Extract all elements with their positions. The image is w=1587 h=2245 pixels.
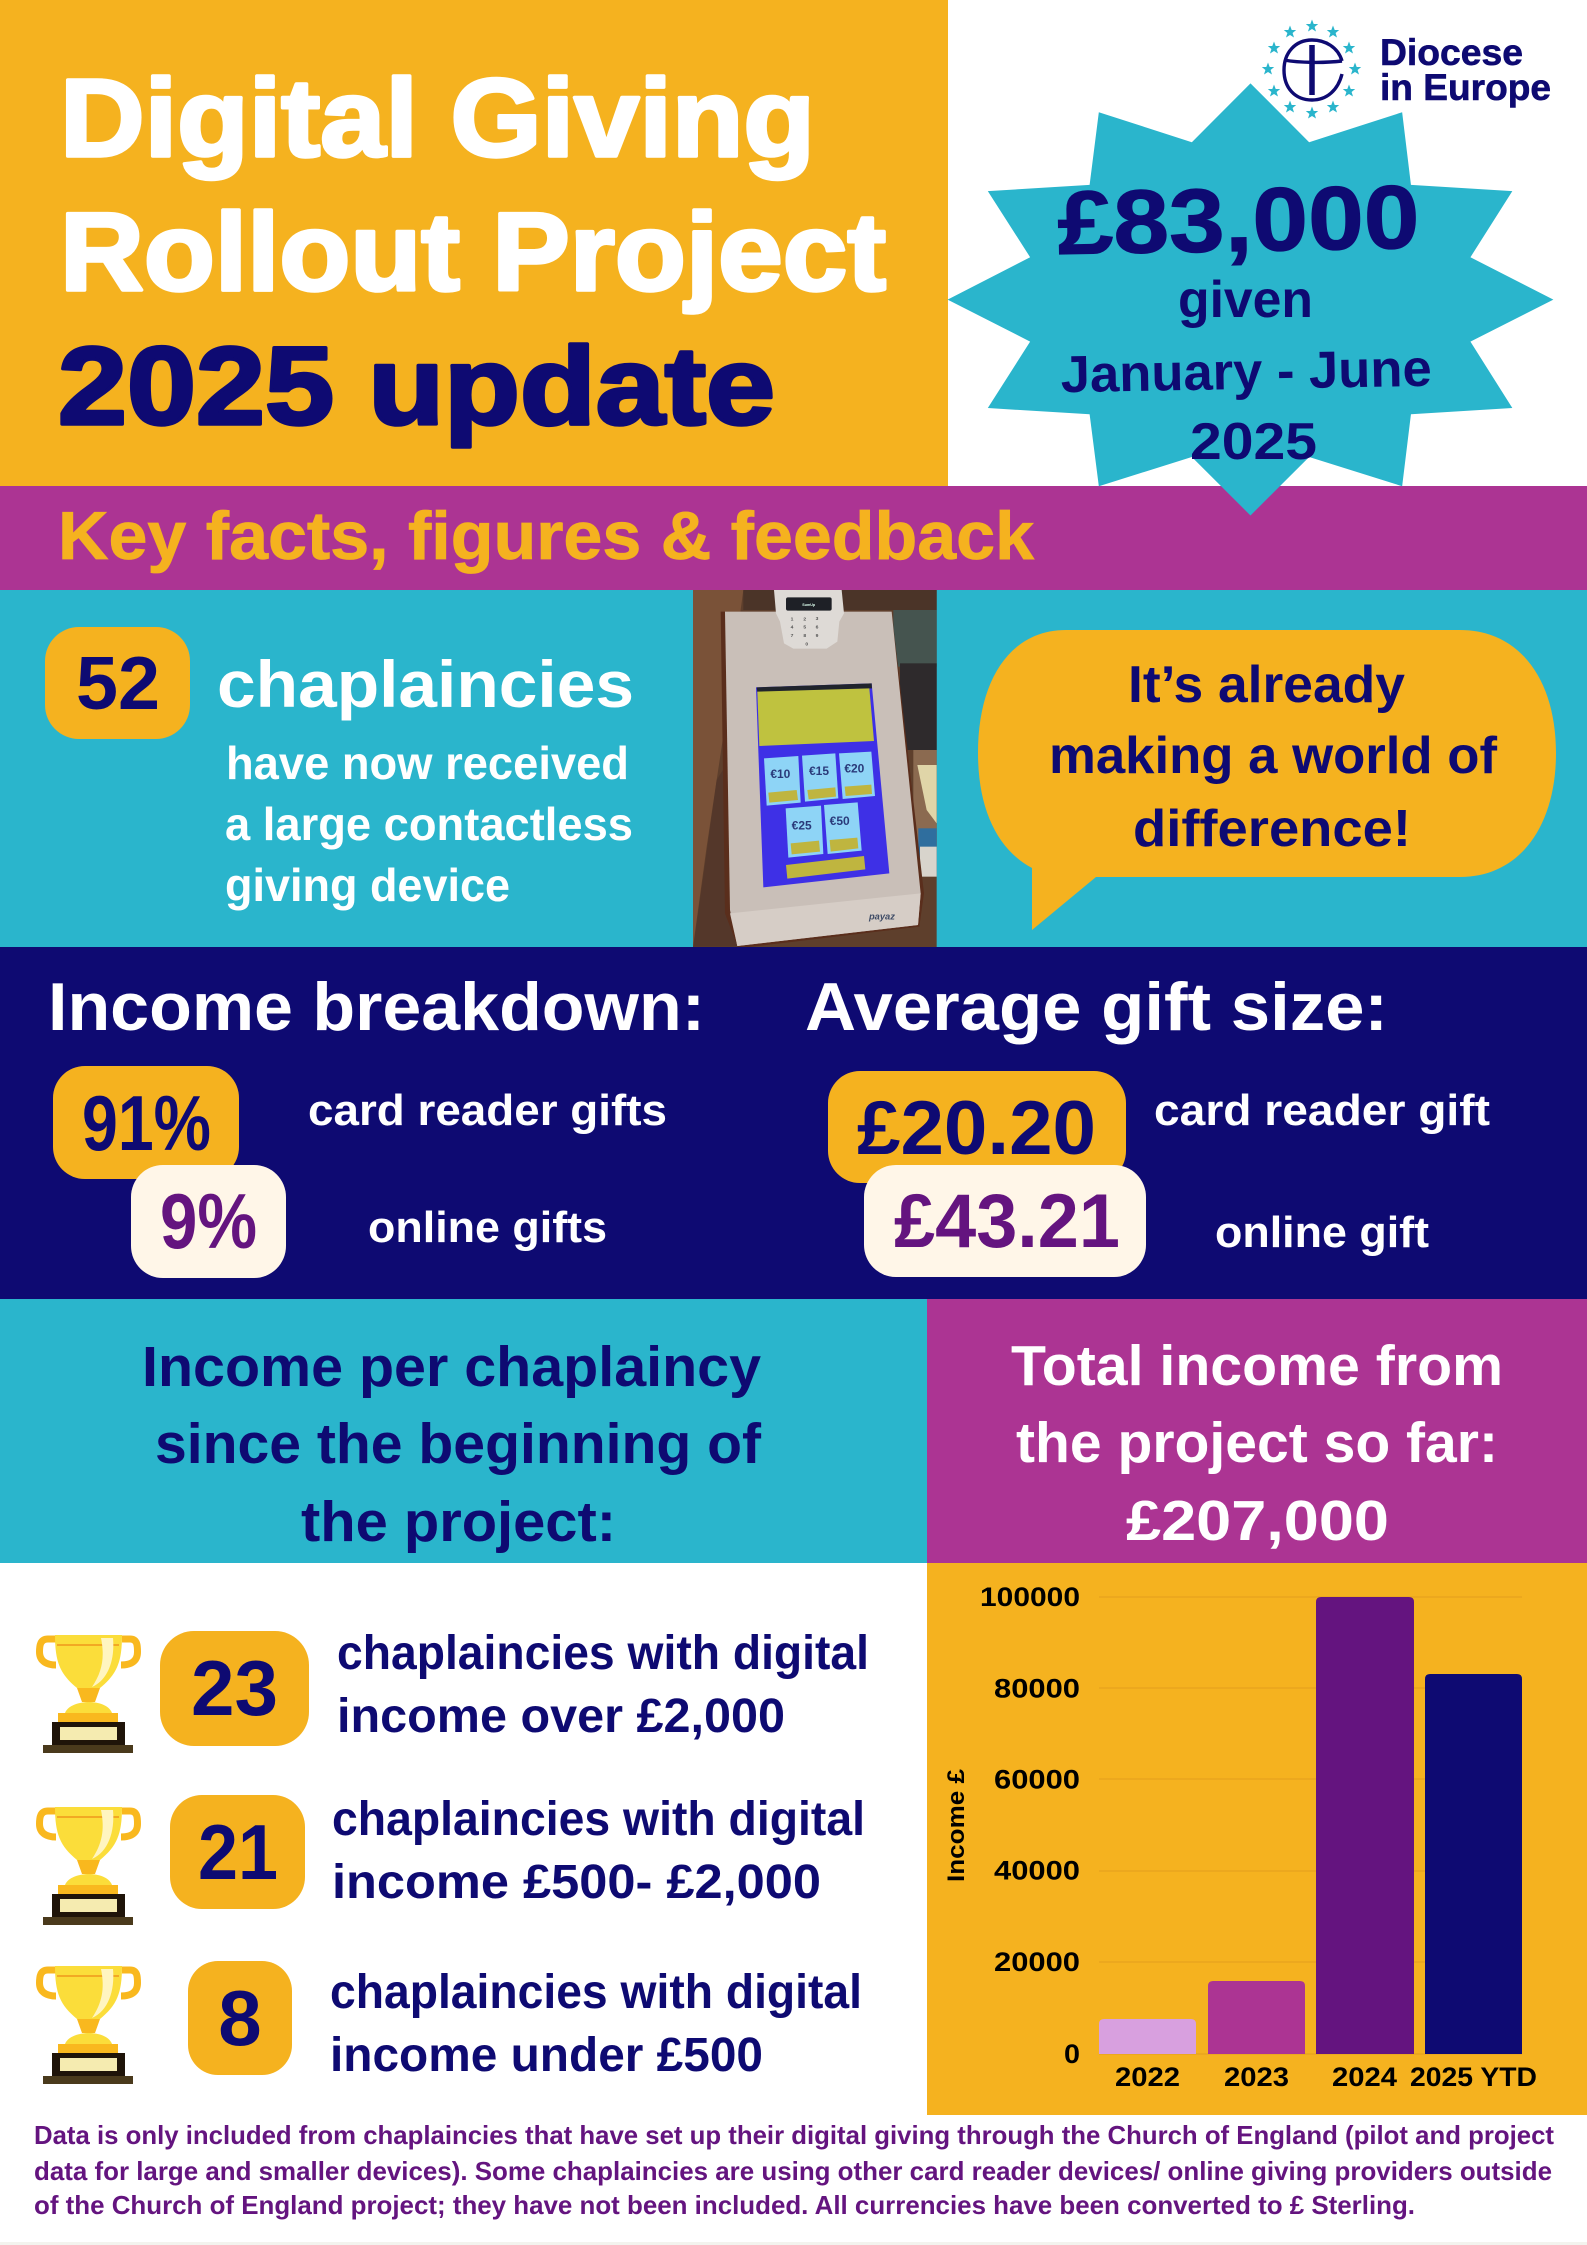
y axis labels: 100000: [980, 1582, 1080, 1612]
panel: total income: £207,000: [1126, 1489, 1389, 1553]
logo: Diocese in Europe: in Europe: [1380, 67, 1551, 108]
badge: 21: 21: [198, 1808, 278, 1896]
bar: 2025 YTD: [1425, 1674, 1522, 2054]
text: device description: a large contactless: [225, 798, 633, 850]
y axis labels: 80000: [994, 1674, 1080, 1704]
y axis labels: [980, 1582, 1080, 2069]
photo: contactless giving device: €50: [830, 814, 850, 828]
bar: 2024: [1316, 1597, 1414, 2054]
panel: income per chaplaincy heading: the project:: [301, 1490, 616, 1554]
badge: £43.21: £43.21: [894, 1179, 1120, 1264]
text: £500-£2,000: income £500- £2,000: [332, 1856, 821, 1909]
starburst callout: £83,000: given: [1178, 271, 1313, 329]
panel: income per chaplaincy heading: Income per chaplaincy: [142, 1335, 761, 1399]
text: under £500: [330, 1966, 862, 2082]
speech bubble: [978, 630, 1556, 930]
title: [58, 57, 886, 448]
speech bubble: making a world of: [1049, 727, 1498, 785]
photo: contactless giving device: €25: [792, 818, 812, 832]
photo: contactless giving device: 1: [791, 617, 794, 623]
title: Rollout Project: [60, 191, 886, 314]
starburst callout: £83,000: January - June: [1060, 340, 1432, 404]
label: online gifts: online gifts: [368, 1203, 607, 1252]
badge: 23: [160, 1631, 309, 1746]
text: under £500: chaplaincies with digital: [330, 1966, 862, 2019]
photo: contactless giving device: 4: [791, 625, 794, 631]
x axis labels: 2022: [1115, 2062, 1180, 2092]
photo: contactless giving device: payaz: [868, 911, 895, 921]
badge: 91%: [53, 1066, 239, 1179]
photo: contactless giving device: SumUp: [802, 603, 816, 607]
footnote: [34, 2120, 1554, 2220]
y axis labels: 20000: [994, 1947, 1080, 1977]
speech bubble: difference!: [1133, 800, 1411, 858]
photo: contactless giving device: €20: [844, 762, 865, 776]
text: device description: [225, 737, 633, 911]
badge: £20.20: £20.20: [857, 1086, 1096, 1171]
panel: total income: Total income from: [1011, 1334, 1503, 1398]
photo: contactless giving device: 8: [803, 633, 806, 639]
badge: 8: 8: [218, 1974, 262, 2062]
x axis labels: [1115, 2062, 1537, 2092]
bar chart: income per year: [927, 1563, 1587, 2115]
starburst callout: £83,000: [948, 83, 1553, 515]
bar: 2023: [1208, 1981, 1305, 2054]
badge: 9%: 9%: [160, 1177, 257, 1265]
panel: total income: the project so far:: [1016, 1411, 1498, 1475]
panel: title header: [0, 0, 948, 486]
photo: contactless giving device: €15: [809, 764, 829, 778]
heading: income breakdown: Income breakdown:: [48, 969, 705, 1045]
footnote: data for large and smaller devices). Some chaplaincies are using other card reader devices/ online giving providers outside: [34, 2156, 1552, 2186]
y axis labels: 40000: [994, 1856, 1080, 1886]
badge: £43.21: [864, 1165, 1146, 1277]
y axis labels: 60000: [994, 1764, 1080, 1794]
card reader: [774, 590, 844, 649]
text: over £2,000: income over £2,000: [337, 1690, 785, 1743]
panel: total income: [927, 1299, 1587, 1563]
photo: contactless giving device: 5: [803, 625, 806, 631]
panel: income breakdown and average gift: [0, 947, 1587, 1299]
badge: 52: 52: [76, 641, 160, 725]
logo: Diocese in Europe: Diocese: [1380, 32, 1523, 73]
label: online gift: online gift: [1215, 1208, 1429, 1257]
panel: key facts band: [0, 486, 1587, 590]
photo: contactless giving device: 3: [816, 616, 819, 622]
photo: contactless giving device: 0: [805, 641, 808, 647]
icon: trophy 1: [40, 1635, 138, 1753]
x axis labels: 2025 YTD: [1410, 2062, 1537, 2092]
text: under £500: income under £500: [330, 2029, 763, 2082]
text: £500-£2,000: [332, 1793, 865, 1909]
speech bubble: It’s already: [1128, 656, 1405, 714]
logo: Diocese in Europe: [1262, 20, 1551, 118]
bar: 2022: [1099, 2019, 1196, 2054]
photo: contactless giving device: 7: [791, 633, 794, 639]
starburst callout: £83,000: 2025: [1190, 413, 1317, 471]
text: chaplaincies: chaplaincies: [217, 647, 634, 721]
heading: average gift size: Average gift size:: [805, 969, 1388, 1045]
footnote: of the Church of England project; they have not been included. All currencies have been converted to £ Sterling.: [34, 2190, 1415, 2220]
text: £500-£2,000: chaplaincies with digital: [332, 1793, 865, 1846]
photo: contactless giving device: 6: [816, 625, 819, 631]
device body: [721, 612, 924, 948]
photo: contactless giving device: 2: [803, 617, 806, 623]
footnote: Data is only included from chaplaincies that have set up their digital giving through the Church of England (pilot and project: [34, 2120, 1554, 2150]
badge: 23: 23: [191, 1644, 278, 1732]
screen: [756, 683, 889, 887]
panel: chaplaincies and device: [0, 590, 1587, 947]
text: over £2,000: chaplaincies with digital: [337, 1627, 869, 1680]
panel: income per chaplaincy heading: [0, 1299, 927, 1563]
text: device description: giving device: [225, 859, 510, 911]
heading: key facts: Key facts, figures & feedback: [58, 498, 1034, 574]
text: device description: have now received: [226, 737, 629, 789]
photo: contactless giving device: €10: [770, 767, 791, 781]
text: over £2,000: [337, 1627, 869, 1743]
y axis title: Income £: [943, 1768, 970, 1882]
label: card reader gifts: card reader gifts: [308, 1086, 667, 1135]
x axis labels: 2024: [1332, 2062, 1397, 2092]
photo: contactless giving device: [693, 590, 937, 949]
badge: 21: [170, 1795, 305, 1909]
title: Digital Giving: [60, 57, 815, 180]
panel: income per chaplaincy heading: since the beginning of: [155, 1412, 762, 1476]
badge: 9%: [131, 1165, 286, 1278]
title: 2025 update: [58, 325, 775, 448]
badge: 91%: 91%: [82, 1079, 211, 1167]
icon: trophy 3: [40, 1966, 138, 2084]
icon: trophy 2: [40, 1807, 138, 1925]
photo: contactless giving device: 9: [816, 633, 819, 639]
x axis labels: 2023: [1224, 2062, 1289, 2092]
badge: 8: [188, 1961, 292, 2075]
badge: £20.20: [828, 1071, 1126, 1183]
starburst callout: £83,000: £83,000: [1057, 168, 1420, 274]
badge: 52: [45, 627, 190, 739]
label: card reader gift: card reader gift: [1154, 1086, 1490, 1135]
y axis labels: 0: [1064, 2039, 1080, 2069]
